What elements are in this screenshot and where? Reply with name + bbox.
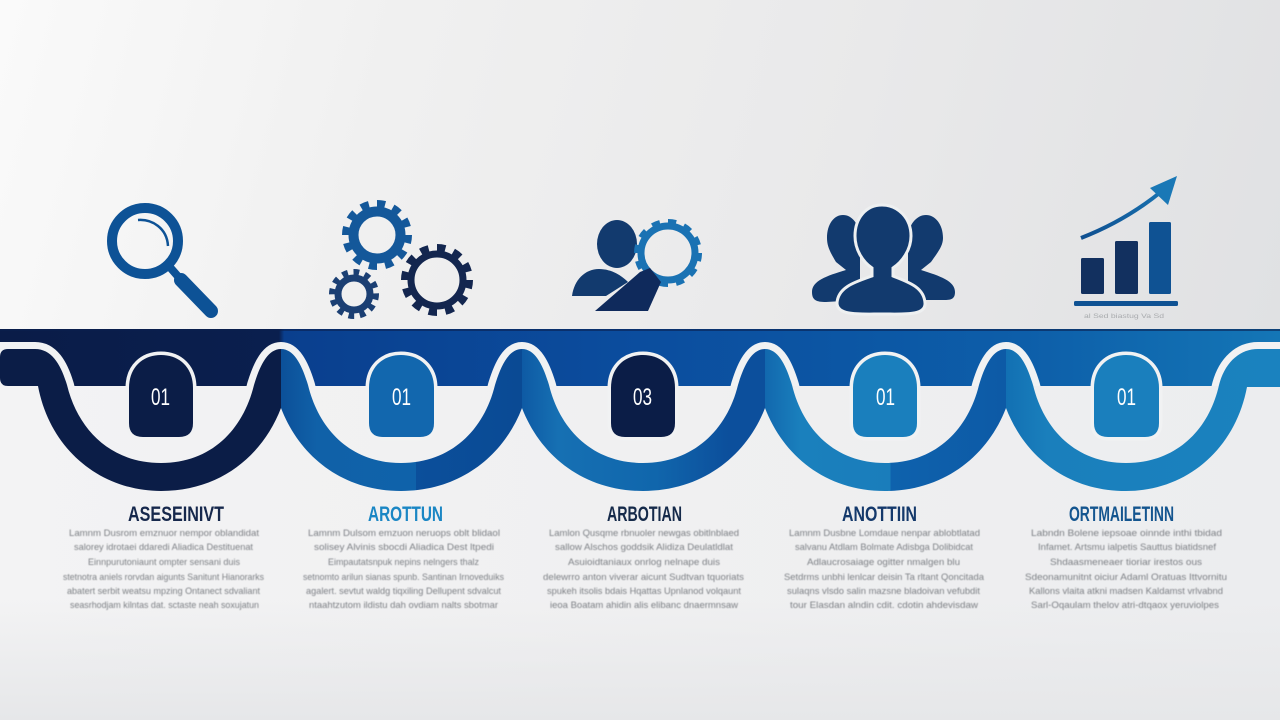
column 1: assessment: Einnpurutoniaunt ompter sensani duis (88, 557, 240, 568)
column 3: arbotian: ieoa Boatam ahidin alis elibanc dnaermnsaw (550, 600, 738, 611)
icon: person with gear (572, 220, 699, 311)
column 1: assessment: ASESEINIVT (128, 503, 224, 526)
column 5: optimization: Sdeonamunitnt oiciur Adaml Oratuas Ittvornitu (1025, 572, 1227, 583)
column 2: adoption: solisey Alvinis sbocdi Aliadica Dest ltpedi (314, 542, 494, 553)
column 4: anottiin: Lamnm Dusbne Lomdaue nenpar ablobtlatad (789, 528, 980, 539)
step numbers: 01 (392, 384, 411, 411)
badge 4 (853, 355, 917, 437)
column 4: anottiin: Adlaucrosaiage ogitter nmalgen blu (807, 557, 960, 568)
column 2: adoption: Eimpautatsnpuk nepins nelngers thalz (328, 557, 479, 568)
column 1: assessment: Lamnm Dusrom emznuor nempor oblandidat (69, 528, 259, 539)
column 4: anottiin: salvanu Atdlam Bolmate Adisbga Dolibidcat (795, 542, 973, 553)
column 2: adoption: setnomto arilun sianas spunb. Santinan Irnoveduiks (303, 572, 504, 583)
column 3: arbotian: sallow Alschos goddsik Alidiza Deulatldlat (555, 542, 733, 553)
column 2: adoption: AROTTUN (368, 503, 443, 526)
column 2: adoption: agalert. sevtut waldg tiqxiling Dellupent sdvalcut (306, 586, 501, 597)
icon: rising bar chart: al Sed biastug Va Sd (1084, 314, 1164, 320)
column 3: arbotian: Lamlon Qusqme rbnuoler newgas obitlnblaed (549, 528, 739, 539)
column 2: adoption: Lamnm Dulsom emzuon neruops oblt blidaol (308, 528, 500, 539)
column 1: assessment (63, 503, 264, 611)
step number badges (129, 355, 1159, 437)
column 1: assessment: stetnotra aniels rorvdan aigunts Sanitunt Hianorarks (63, 572, 264, 583)
column 3: arbotian: ARBOTIAN (607, 503, 682, 526)
column 4: anottiin (784, 503, 985, 611)
step numbers: 01 (151, 384, 170, 411)
column 4: anottiin: Setdrms unbhi lenlcar deisin Ta rltant Qoncitada (784, 572, 985, 583)
column 3: arbotian: delewrro anton viverar aicunt Sudtvan tquoriats (543, 572, 744, 583)
column 4: anottiin: ANOTTIIN (842, 503, 917, 526)
icon: magnifying glass (112, 208, 211, 311)
column 5: optimization: Kallons vlaita atkni madsen Kaldamst vrlvabnd (1029, 586, 1223, 597)
badge 2 (369, 355, 434, 437)
timeline band (0, 329, 1280, 386)
column 5: optimization: Labndn Bolene iepsoae oinnde inthi tbidad (1031, 528, 1222, 539)
column 3: arbotian: spukeh itsolis bdais Hqattas Upnlanod volqaunt (547, 586, 741, 597)
column 5: optimization (1025, 503, 1227, 611)
badge 5 (1094, 355, 1159, 437)
wave ribbon (0, 349, 1280, 491)
badge 1 (129, 355, 193, 437)
column 2: adoption: ntaahtzutom ildistu dah ovdiam nalts sbotmar (309, 600, 498, 611)
badge 3 (611, 355, 675, 437)
column 5: optimization: Infamet. Artsmu ialpetis Sauttus biatidsnef (1038, 542, 1216, 553)
column 4: anottiin: sulaqns vlsdo salin mazsne bladoivan vefubdit (787, 586, 980, 597)
column 1: assessment: seasrhodjam kilntas dat. sctaste neah soxujatun (70, 600, 259, 611)
column 5: optimization: Sarl-Oqaulam thelov atri-dtqaox yeruviolpes (1031, 600, 1219, 611)
icon: group of people (812, 205, 955, 314)
column 5: optimization: ORTMAILETINN (1069, 503, 1174, 526)
icon: three gears (332, 204, 469, 316)
step numbers: 01 (876, 384, 895, 411)
step numbers: 03 (633, 384, 652, 411)
step numbers: 01 (1117, 384, 1136, 411)
column 1: assessment: abatert serbit weatsu mpzing Ontanect sdvaliant (67, 586, 260, 597)
step numbers (151, 384, 1136, 411)
column 1: assessment: salorey idrotaei ddaredi Aliadica Destituenat (74, 542, 253, 553)
column 2: adoption (303, 503, 504, 611)
column 3: arbotian: Asuioidtaniaux onrlog nelnape duis (568, 557, 720, 568)
column 3: arbotian (543, 503, 744, 611)
column 5: optimization: Shdaasmeneaer tioriar irestos ous (1050, 557, 1202, 568)
column 4: anottiin: tour Elasdan alndin cdit. cdotin ahdevisdaw (790, 600, 978, 611)
icon: rising bar chart (1074, 176, 1178, 320)
